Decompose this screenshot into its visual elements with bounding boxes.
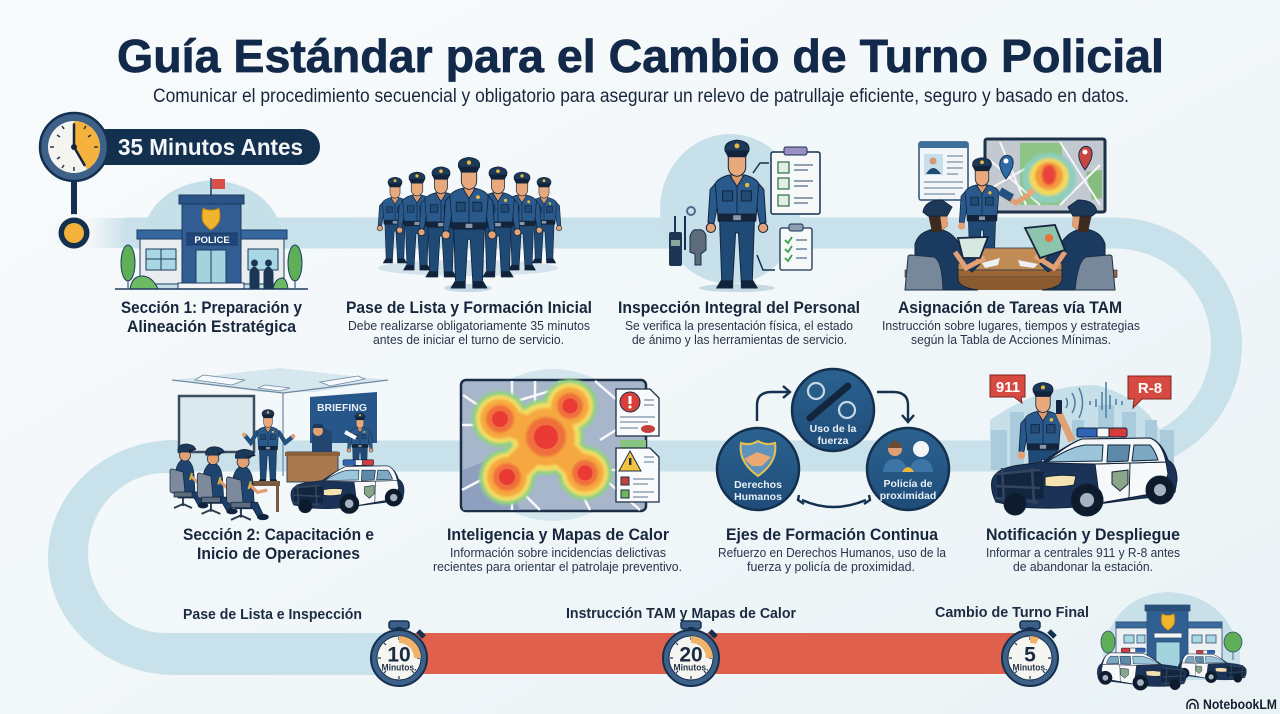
panel: inspection	[618, 134, 860, 347]
panel: notification	[986, 375, 1180, 574]
icon: police station: POLICE	[194, 235, 230, 246]
stopwatch: 10 minutes	[371, 621, 427, 686]
panel: roll call	[346, 157, 592, 347]
description: Debe realizarse obligatoriamente 35 minutos	[348, 319, 590, 333]
heading	[183, 526, 374, 563]
stopwatch: 10 minutes: 10	[387, 644, 411, 666]
description	[348, 319, 590, 347]
icon: heat map with reports	[461, 369, 659, 521]
stopwatch: 5 minutes: Minutos.	[1012, 662, 1048, 672]
icon: station with patrol cars	[1097, 592, 1246, 690]
description: según la Tabla de Acciones Mínimas.	[911, 333, 1111, 347]
disc: use of force: fuerza	[818, 435, 849, 447]
heading: Inspección Integral del Personal	[618, 299, 860, 317]
stopwatch: 10 minutes: Minutos.	[382, 662, 416, 672]
description	[718, 546, 946, 574]
icon: clock with stem and dot	[40, 113, 108, 252]
disc: human rights: Derechos	[734, 479, 782, 491]
disc: use of force	[792, 369, 874, 451]
description: Refuerzo en Derechos Humanos, uso de la	[718, 546, 946, 560]
description	[625, 319, 853, 347]
description: Se verifica la presentación física, el estado	[625, 319, 853, 333]
description: de abandonar la estación.	[1013, 560, 1153, 574]
panel: training axes	[717, 369, 949, 574]
35 minutes marker	[40, 113, 320, 252]
red final timeline bar	[399, 633, 1030, 674]
stopwatch: 20 minutes: Minutos.	[674, 662, 708, 672]
timeline label: second stage: Instrucción TAM y Mapas de Calor	[566, 606, 796, 622]
icon: briefing table with map screen	[905, 139, 1117, 290]
description: fuerza y policía de proximidad.	[747, 560, 915, 574]
timeline label: third stage: Cambio de Turno Final	[935, 605, 1089, 621]
description: antes de iniciar el turno de servicio.	[373, 333, 564, 347]
description: Informar a centrales 911 y R-8 antes	[986, 546, 1180, 560]
heading: Alineación Estratégica	[127, 318, 297, 336]
stopwatch: 20 minutes: 20	[679, 644, 703, 666]
description	[882, 319, 1140, 347]
stopwatch: 5 minutes: 5	[1024, 644, 1036, 666]
icon: briefing room with police car: BRIEFING	[317, 402, 367, 414]
time pill: 35 Minutos Antes	[118, 134, 303, 160]
description: recientes para orientar el patrolaje preventivo.	[433, 560, 682, 574]
stopwatch: 5 minutes	[1002, 621, 1058, 686]
icon: police station	[115, 178, 308, 289]
time pill	[85, 129, 320, 165]
title: Guía Estándar para el Cambio de Turno Policial	[117, 30, 1164, 82]
icon: three training discs with arrows	[717, 369, 949, 510]
disc: community policing	[867, 428, 949, 510]
description: Información sobre incidencias delictivas	[450, 546, 666, 560]
heading: Sección 2: Capacitación e	[183, 526, 374, 544]
heading: Sección 1: Preparación y	[121, 299, 303, 317]
description: de ánimo y las herramientas de servicio.	[632, 333, 847, 347]
arrows between discs	[757, 386, 914, 507]
winding timeline path	[48, 233, 1226, 675]
panel: section 1	[115, 178, 308, 336]
description	[433, 546, 682, 574]
icon: officer on radio with police car: 911	[996, 379, 1020, 396]
heading: Pase de Lista y Formación Inicial	[346, 299, 592, 317]
disc: community policing: Policía de	[883, 478, 933, 490]
disc: human rights	[717, 428, 799, 510]
timeline label: first stage: Pase de Lista e Inspección	[183, 607, 362, 623]
subtitle: Comunicar el procedimiento secuencial y obligatorio para asegurar un relevo de patrullaje eficiente, seguro y basado en datos.	[153, 86, 1129, 107]
icon: officers in formation	[377, 157, 562, 292]
disc: human rights: Humanos	[734, 491, 782, 503]
heading	[121, 299, 303, 336]
heading: Ejes de Formación Continua	[726, 526, 939, 544]
icon: officer on radio with police car: R-8	[1138, 380, 1162, 397]
panel: heat maps	[433, 369, 682, 574]
panel: task assignment	[882, 139, 1140, 347]
stopwatch: 20 minutes	[663, 621, 719, 686]
heading: Inicio de Operaciones	[197, 545, 360, 563]
heading: Inteligencia y Mapas de Calor	[447, 526, 670, 544]
description	[986, 546, 1180, 574]
disc: use of force: Uso de la	[810, 423, 856, 435]
icon: briefing room with police car	[170, 368, 404, 520]
heading: Asignación de Tareas vía TAM	[898, 299, 1122, 317]
icon: inspected officer with checklists and tools	[660, 134, 820, 292]
icon: officer on radio with police car	[990, 375, 1177, 516]
heading: Notificación y Despliegue	[986, 526, 1180, 544]
panel: section 2	[170, 368, 404, 563]
description: Instrucción sobre lugares, tiempos y estrategias	[882, 319, 1140, 333]
disc: community policing: proximidad	[880, 490, 936, 502]
